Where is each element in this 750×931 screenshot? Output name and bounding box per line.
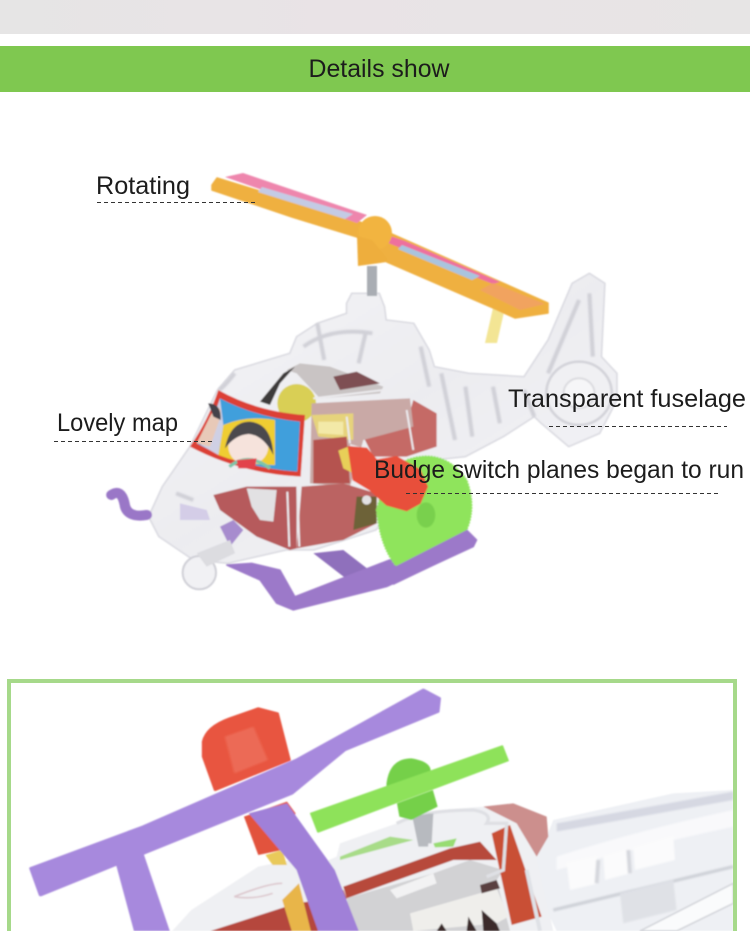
section header band [0, 46, 750, 92]
gearbox and sticker detail [180, 363, 477, 610]
chrome canopy parts [287, 363, 383, 398]
red switch [338, 447, 427, 511]
mast [367, 266, 377, 296]
skid and cross bar [180, 503, 477, 610]
helicopter photo [111, 173, 617, 610]
gearbox close-up [329, 802, 553, 931]
red gearbox blocks [363, 400, 437, 457]
heading: Details show: Details show [308, 55, 450, 83]
lovely map sticker [190, 390, 305, 477]
yellow gear [277, 384, 316, 423]
lower-left glass and red body [174, 706, 312, 931]
rear skid hook [111, 493, 147, 516]
front wheel [183, 540, 235, 589]
green frame [9, 681, 735, 931]
chrome highlights [247, 488, 371, 522]
label: Lovely map: Lovely map [57, 409, 178, 437]
green gear wheel [377, 456, 472, 567]
rotor blades [212, 173, 548, 343]
panel: close-up photo [9, 681, 735, 931]
re-drawn skid front edge [388, 530, 477, 585]
red switch close-up [203, 708, 296, 865]
purple skid close-up [31, 690, 439, 931]
label: Budge switch planes began to run: Budge switch planes began to run [374, 456, 744, 484]
green gear close-up [311, 746, 508, 847]
clear tail close-up [527, 790, 733, 931]
top photo strip [0, 0, 750, 34]
transparent fuselage [111, 273, 617, 563]
label: Transparent fuselage: Transparent fuselage [508, 385, 746, 413]
label: Rotating: Rotating [96, 172, 190, 200]
